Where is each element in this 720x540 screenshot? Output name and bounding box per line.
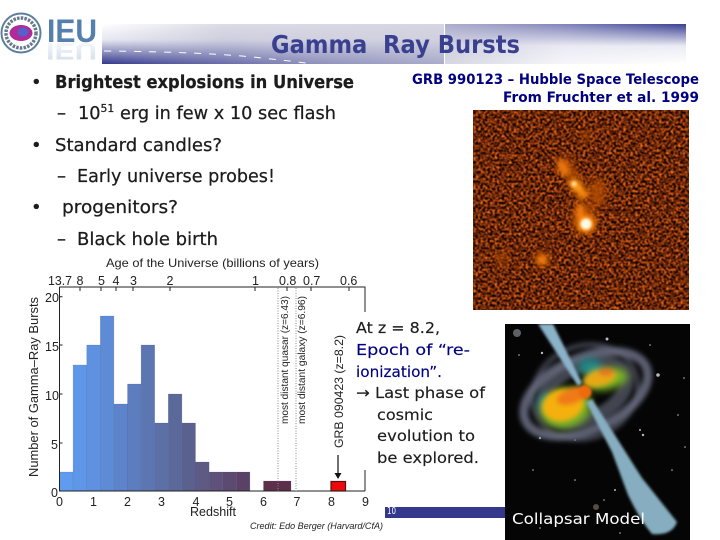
rotated annotations: most distant galaxy (z=6.96) <box>297 296 308 424</box>
tick labels: 20 <box>45 291 59 305</box>
logo: IEU: IEU <box>47 13 97 49</box>
logo: IEU: IEU <box>46 37 97 64</box>
text block: epoch of re-ionization: ionization”. <box>356 363 442 381</box>
histogram chart <box>27 256 383 532</box>
tick labels: 8 <box>328 495 335 509</box>
text block: epoch of re-ionization: cosmic <box>377 406 433 424</box>
bullet list: 51 <box>101 102 114 115</box>
histogram bars <box>60 316 291 491</box>
tick labels: 0.6 <box>340 274 357 288</box>
rotated annotations <box>280 296 346 448</box>
tick labels: 9 <box>362 495 369 509</box>
tick labels: 1 <box>252 274 259 288</box>
bullet list: Standard candles? <box>55 135 222 156</box>
bullet list: Black hole birth <box>77 229 218 250</box>
image: collapsar model <box>505 323 690 540</box>
tick labels <box>45 274 369 509</box>
tick labels: 5 <box>226 495 233 509</box>
title: Gamma Ray Bursts <box>271 30 520 59</box>
bullet list: • <box>31 72 42 93</box>
logo: IEU <box>2 13 97 64</box>
tick labels: 5 <box>51 438 58 452</box>
tick labels: 1 <box>90 495 97 509</box>
bullet list: Brightest explosions in Universe <box>55 72 354 93</box>
image caption <box>412 72 699 106</box>
bullet list: – <box>57 229 66 250</box>
bullet list: – <box>57 103 66 124</box>
tick labels: 10 <box>45 389 59 403</box>
tick labels: 2 <box>166 274 174 288</box>
image caption: From Fruchter et al. 1999 <box>503 90 699 106</box>
jet origin glow <box>578 386 592 398</box>
tick labels: 13.7 <box>48 274 72 288</box>
rotated annotations: GRB 090423 (z=8.2) <box>332 335 346 448</box>
text block: epoch of re-ionization: be explored. <box>377 449 479 467</box>
tick labels: 6 <box>260 495 267 509</box>
tick labels: 3 <box>130 274 137 288</box>
chart axis titles: Redshift <box>190 505 237 519</box>
gas disk <box>516 340 656 444</box>
text block: epoch of re-ionization: evolution to <box>377 427 475 445</box>
tick labels: 4 <box>112 274 120 288</box>
footer bar with slide number: 10 <box>387 506 396 517</box>
image: GRB 990123 host galaxy <box>473 110 689 310</box>
tick labels: 8 <box>76 274 84 288</box>
bullet list: Early universe probes! <box>77 166 275 187</box>
bullet list: progenitors? <box>62 197 178 218</box>
tick labels: 4 <box>192 495 200 509</box>
tick labels: 0 <box>51 486 58 500</box>
tick labels: 0.7 <box>303 274 320 288</box>
bullet list: erg in few x 10 sec flash <box>114 103 336 124</box>
red bar: GRB 090423 <box>331 482 346 491</box>
text block: epoch of re-ionization: At z = 8.2, <box>356 319 440 337</box>
dotted reference lines <box>278 288 296 491</box>
coloured accretion core <box>536 359 630 434</box>
bullet list <box>31 72 354 250</box>
image caption: GRB 990123 – Hubble Space Telescope <box>412 72 699 88</box>
bullet list: • <box>31 135 42 156</box>
chart axis titles <box>27 256 319 519</box>
bullet list: 10 <box>78 103 101 124</box>
image label: Collapsar Model <box>512 510 645 528</box>
tick labels: 3 <box>158 495 165 509</box>
text block: epoch of re-ionization: → Last phase of <box>356 384 486 402</box>
tick labels: 0.8 <box>279 274 296 288</box>
tick labels: 15 <box>45 340 59 354</box>
tick labels: 0 <box>56 495 63 509</box>
rotated annotations: most distant quasar (z=6.43) <box>280 296 291 424</box>
chart axis titles: Age of the Universe (billions of years) <box>106 256 319 270</box>
tick labels: 5 <box>98 274 105 288</box>
text block: epoch of re-ionization <box>356 319 486 467</box>
tick labels: 7 <box>294 495 300 509</box>
tick labels: 2 <box>124 495 131 509</box>
gamma-ray jets <box>538 324 677 534</box>
arrow to red bar <box>334 455 342 479</box>
chart axis titles: Number of Gamma–Ray Bursts <box>27 297 41 477</box>
text block: epoch of re-ionization: Epoch of “re- <box>356 341 470 359</box>
bullet list: – <box>57 166 66 187</box>
chart axes <box>60 287 365 491</box>
header bar <box>102 24 686 64</box>
footer bar with slide number <box>385 506 510 518</box>
bullet list: • <box>31 197 42 218</box>
credit line: Credit: Edo Berger (Harvard/CfA) <box>250 521 383 532</box>
